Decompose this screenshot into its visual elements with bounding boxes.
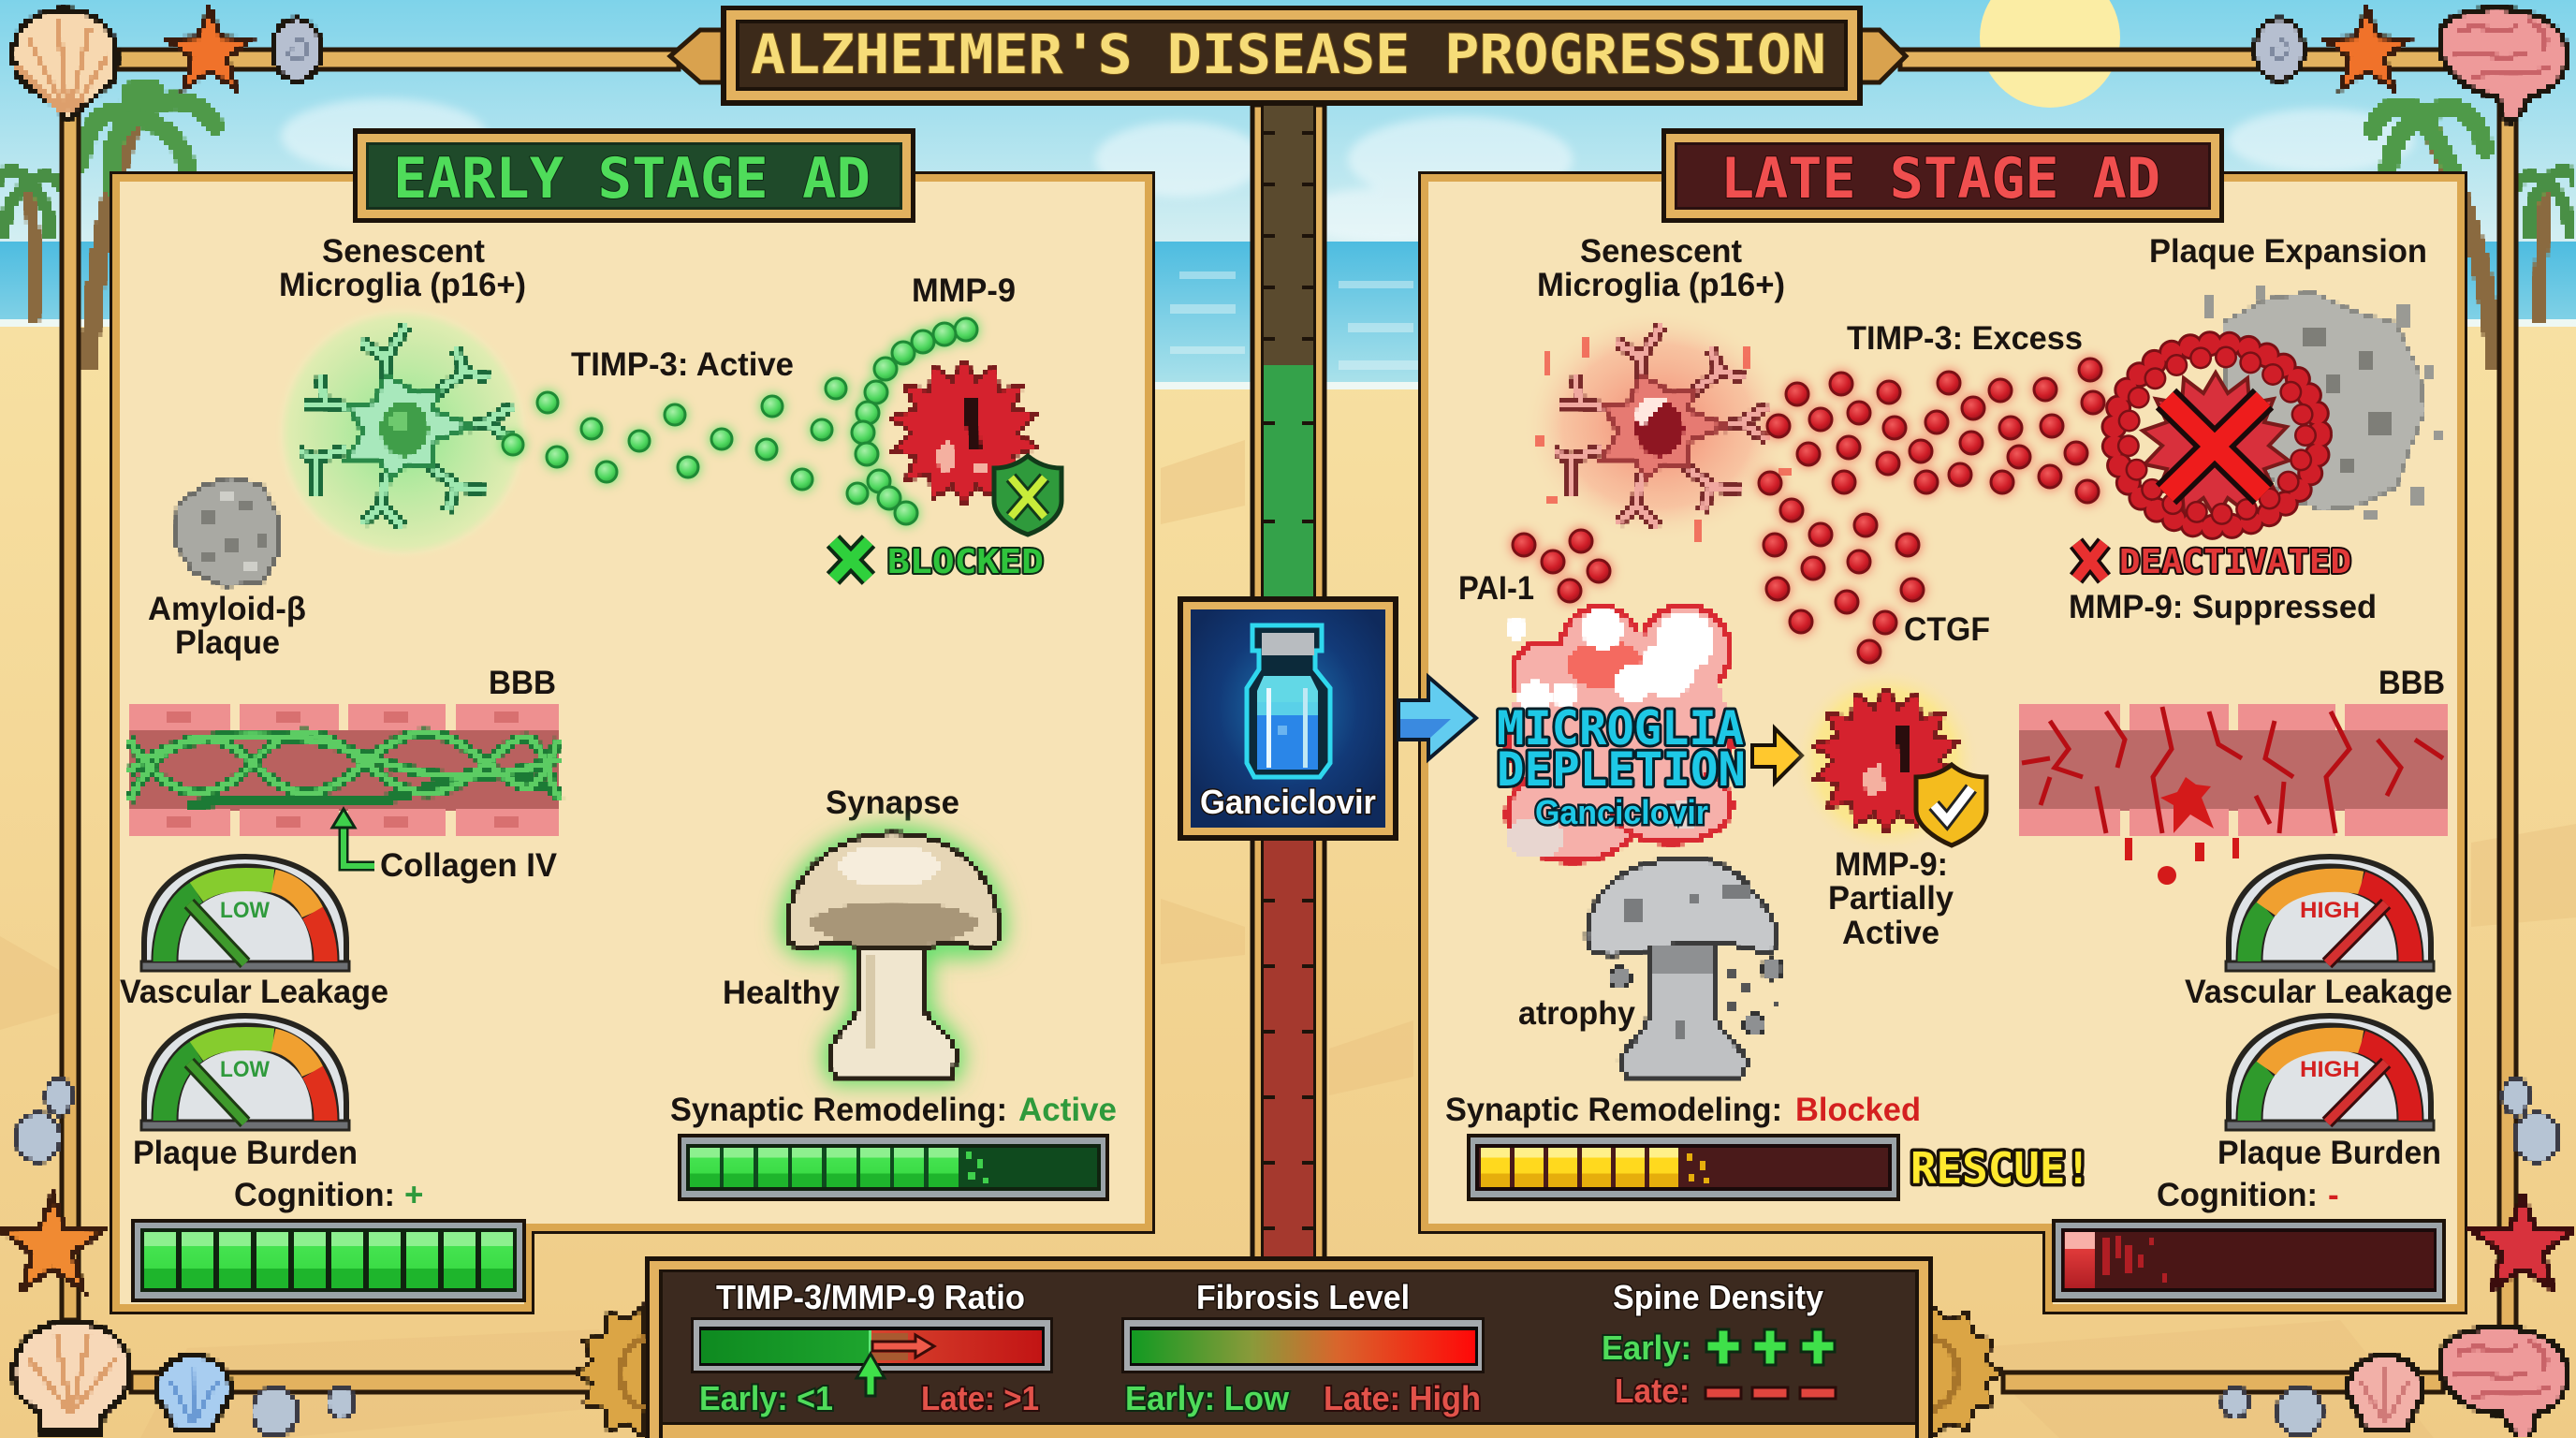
- blocked badge: BLOCKED: [887, 543, 1044, 581]
- MMP-9 partially active label: Partially: [1828, 880, 1954, 917]
- cognition label: Cognition:: [2157, 1177, 2318, 1213]
- metric: spine density: Late:: [1615, 1372, 1690, 1410]
- cognition label: Cognition:: [234, 1177, 395, 1213]
- metric: ratio: [691, 1278, 1053, 1417]
- icon: bottom-left scallop shell: [13, 1322, 130, 1432]
- clouds: [281, 98, 2415, 243]
- icon: left starfish: [3, 1196, 102, 1289]
- metric: fibrosis: [1121, 1278, 1485, 1417]
- metric: ratio: Early: <1: [699, 1379, 833, 1417]
- icon: right red starfish: [2473, 1196, 2572, 1289]
- gauge: vascular leakage high: [2226, 857, 2434, 971]
- microglia depletion text: [1497, 701, 1746, 831]
- senescent microglia label: Senescent: [1580, 233, 1742, 270]
- icon: yellow shield check: [1916, 765, 1986, 845]
- metric: ratio: Late: >1: [921, 1379, 1039, 1417]
- amyloid label: [148, 591, 306, 661]
- icon: right frame pebbles: [2503, 1078, 2559, 1162]
- plaque burden label: Plaque Burden: [133, 1135, 358, 1171]
- microglia depletion text: Ganciclovir: [1535, 793, 1708, 831]
- healthy label: Healthy: [723, 975, 841, 1011]
- vascular leakage label: Vascular Leakage: [120, 974, 388, 1010]
- icon: depletion cloud: [1505, 606, 1732, 861]
- icon: blue scallop shell: [156, 1356, 230, 1429]
- synapse label: Synapse: [826, 785, 959, 821]
- rescue label: RESCUE!: [1910, 1143, 2091, 1194]
- icon: green microglia: [273, 303, 532, 562]
- metric: ratio: TIMP-3/MMP-9 Ratio: [716, 1278, 1025, 1316]
- synaptic remodeling bar: [678, 1134, 1109, 1201]
- MMP-9 partially active label: MMP-9:: [1835, 846, 1948, 883]
- atrophy label: atrophy: [1518, 995, 1636, 1032]
- amyloid label: Plaque: [175, 624, 280, 661]
- synaptic remodeling blocked label: Synaptic Remodeling:: [1445, 1092, 1782, 1128]
- synaptic remodeling active label: Synaptic Remodeling:: [670, 1092, 1007, 1128]
- synaptic remodeling blocked label: Blocked: [1795, 1092, 1921, 1128]
- metric: spine density: [1602, 1278, 1836, 1410]
- cognition bar full: [131, 1219, 526, 1302]
- gear left: [576, 1306, 644, 1438]
- icon: bottom-right brain: [2439, 1328, 2567, 1438]
- icon: MMP-9 enzyme blocked: [891, 360, 1037, 506]
- TIMP-3 excess red particles: [1513, 359, 2104, 663]
- icon: vial: [1247, 625, 1330, 777]
- gauge: vascular leakage low: LOW: [220, 898, 270, 923]
- center progression column: [1252, 105, 1325, 1266]
- senescent microglia label: Microglia (p16+): [279, 267, 526, 303]
- icon: top-right brain: [2439, 8, 2567, 122]
- metrics panel: [645, 1256, 1933, 1438]
- panel: early stage: [116, 128, 1149, 1308]
- arrow: yellow rescue: [1752, 728, 1802, 783]
- gauge: vascular leakage low: [141, 857, 349, 971]
- PAI-1 label: PAI-1: [1458, 570, 1534, 607]
- blocked badge: [833, 541, 1044, 581]
- icon: top-left scallop shell: [13, 9, 117, 120]
- title side ornaments: [670, 30, 723, 82]
- sea: [0, 242, 2576, 401]
- gauge: plaque burden high: HIGH: [2300, 1057, 2360, 1082]
- title plate: [721, 6, 1863, 106]
- collagen IV pointer: Collagen IV: [380, 847, 558, 884]
- icon: top-left starfish: [167, 7, 253, 89]
- blood-brain barrier damaged: [2019, 704, 2448, 885]
- palm trees right: [2373, 106, 2576, 370]
- plaque burden label: Plaque Burden: [2217, 1135, 2441, 1171]
- senescent microglia label: Microglia (p16+): [1537, 267, 1785, 303]
- MMP-9 partially active label: [1828, 846, 1954, 951]
- icon: atrophied synapse mushroom: [1587, 858, 1782, 1077]
- BBB label: BBB: [489, 665, 556, 701]
- icon: red microglia: [1522, 309, 1793, 543]
- TIMP-3 excess label: TIMP-3: Excess: [1847, 320, 2083, 357]
- collagen IV pointer: [332, 809, 558, 884]
- gauge: plaque burden low: [141, 1016, 349, 1130]
- heading: late stage: LATE STAGE AD: [1720, 146, 2160, 212]
- senescent microglia label: [279, 233, 526, 303]
- title text: ALZHEIMER'S DISEASE PROGRESSION: [751, 22, 1826, 86]
- icon: expanding plaque: [2204, 286, 2441, 520]
- cognition label: +: [404, 1177, 423, 1213]
- icon: top-right starfish: [2324, 7, 2410, 89]
- metric: fibrosis: Early: Low: [1125, 1379, 1290, 1417]
- icon: bottom-right pebbles: [2222, 1387, 2322, 1436]
- icon: deactivated MMP-9 with ring: [2114, 344, 2320, 527]
- heading: late stage: [1661, 128, 2224, 223]
- synaptic remodeling rescue bar: [1467, 1134, 1900, 1201]
- palm trees left: [0, 88, 215, 370]
- MMP-9 suppressed label: MMP-9: Suppressed: [2069, 589, 2377, 625]
- metric: fibrosis: Fibrosis Level: [1196, 1278, 1410, 1316]
- icon: bottom-left pebbles: [253, 1387, 354, 1436]
- sun: [1980, 0, 2120, 108]
- arrow: green marker: [856, 1354, 885, 1396]
- heading: early stage: [353, 128, 915, 223]
- blood-brain barrier intact with collagen: [129, 704, 559, 836]
- senescent microglia label: [1537, 233, 1785, 303]
- arrow: ganciclovir to depletion: [1398, 677, 1476, 759]
- ganciclovir vial card: Ganciclovir: [1200, 783, 1376, 821]
- icon: green shield: [994, 456, 1061, 535]
- heading: early stage: EARLY STAGE AD: [393, 146, 871, 212]
- CTGF particles: [1764, 499, 1924, 663]
- sand: [0, 323, 2576, 1438]
- cognition label: -: [2328, 1177, 2339, 1213]
- gauge: plaque burden high: [2226, 1016, 2434, 1130]
- BBB label: BBB: [2378, 665, 2445, 701]
- gauge: vascular leakage high: HIGH: [2300, 898, 2360, 923]
- icon: top-left spiral shell: [272, 19, 321, 81]
- icon: pink shell: [2349, 1356, 2422, 1429]
- metric: spine density: Spine Density: [1613, 1278, 1823, 1316]
- icon: MMP-9 partially active: [1793, 667, 1980, 854]
- panel: late stage: [1425, 128, 2461, 1308]
- CTGF label: CTGF: [1904, 611, 1990, 648]
- icon: left frame pebbles: [16, 1078, 72, 1162]
- deactivated badge: DEACTIVATED: [2119, 543, 2351, 581]
- synaptic remodeling active label: Active: [1018, 1092, 1117, 1128]
- vascular leakage label: Vascular Leakage: [2185, 974, 2452, 1010]
- icon: healthy synapse mushroom: [787, 833, 999, 1077]
- TIMP-3 active label: TIMP-3: Active: [571, 346, 794, 383]
- senescent microglia label: Senescent: [322, 233, 485, 270]
- icon: top-right spiral shell: [2255, 19, 2304, 81]
- PAI-1 particles: [1513, 530, 1610, 602]
- gear right: [1933, 1306, 2003, 1438]
- gauge: plaque burden low: LOW: [220, 1057, 270, 1082]
- cognition bar low: [2052, 1219, 2446, 1302]
- amyloid label: Amyloid-β: [148, 591, 306, 627]
- metric: spine density: Early:: [1602, 1328, 1691, 1367]
- icon: amyloid plaque: [176, 477, 279, 586]
- ganciclovir vial card: [1178, 596, 1398, 841]
- TIMP-3 green particles: [503, 318, 977, 524]
- microglia depletion text: DEPLETION: [1497, 742, 1746, 797]
- plaque expansion label: Plaque Expansion: [2149, 233, 2427, 270]
- metric: fibrosis: Late: High: [1324, 1379, 1481, 1417]
- MMP-9 partially active label: Active: [1842, 915, 1939, 951]
- microglia depletion text: MICROGLIA: [1497, 701, 1744, 756]
- MMP-9 label: MMP-9: [912, 272, 1016, 309]
